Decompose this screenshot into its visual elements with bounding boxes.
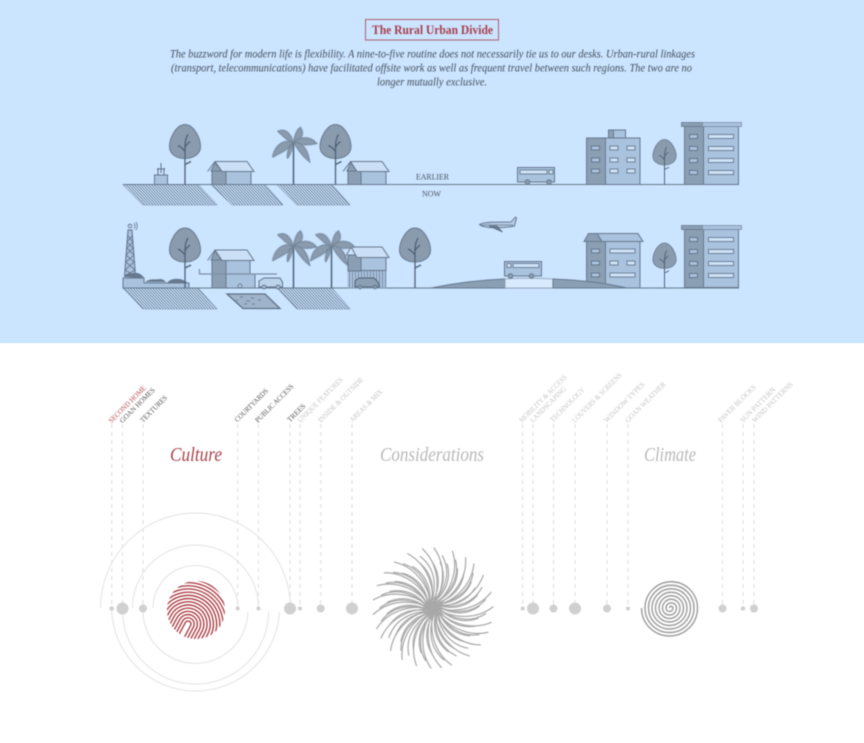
icon: tower block bbox=[682, 226, 742, 288]
icon: house bbox=[343, 162, 389, 184]
rotated labels: considerations: MOBILITY & ACCESS bbox=[517, 373, 569, 424]
heading: considerations: Considerations bbox=[380, 444, 484, 466]
rotated labels: climate: PAVER BLOCKS bbox=[716, 383, 758, 424]
rotated labels: climate bbox=[716, 380, 795, 424]
title: The Rural Urban Divide bbox=[372, 23, 493, 37]
label: earlier: EARLIER bbox=[416, 172, 449, 182]
icon: palm tree bbox=[272, 128, 316, 184]
rotated labels: considerations bbox=[517, 371, 668, 424]
rotated labels: culture: COURTYARDS bbox=[233, 386, 270, 424]
rotated labels: culture: TREES bbox=[285, 402, 307, 424]
icon: spiral bbox=[642, 582, 698, 636]
ground line: now bbox=[123, 287, 739, 289]
ground hatching: now fields bbox=[123, 288, 350, 309]
scene: now bbox=[123, 217, 742, 309]
icon: telecom tower and shrubs bbox=[123, 222, 189, 288]
icon: house bbox=[208, 162, 254, 184]
rotated labels: considerations: LOUVERS & SCREENS bbox=[570, 371, 624, 424]
rotated labels: culture: SECOND HOME bbox=[107, 383, 148, 425]
icon: house with courtyard and car bbox=[200, 250, 282, 289]
rotated labels: considerations: TECHNOLOGY bbox=[548, 385, 587, 424]
dashed leader lines bbox=[112, 424, 754, 604]
icon: bus on bridge bbox=[504, 262, 542, 278]
rotated labels: culture: AREAS & MIX bbox=[348, 387, 385, 424]
rotated labels: culture: PUBLIC ACCESS bbox=[253, 382, 295, 424]
icon: pool bbox=[227, 294, 280, 308]
rotated labels: climate: SUN PATTERN bbox=[738, 385, 778, 424]
icon: small tree bbox=[653, 140, 676, 184]
icon: road embankment bbox=[431, 278, 627, 288]
icon: airplane bbox=[480, 217, 516, 232]
intro text block: The buzzword for modern life is flexibility. A nine-to-five routine does not necessarily tie us to our desks. Urban-rural linkages bbox=[170, 48, 696, 60]
rotated labels: culture: GOAN HOMES bbox=[118, 386, 157, 425]
panel: culture, considerations and climate diagram bbox=[100, 371, 795, 691]
icon: tower block bbox=[682, 122, 742, 184]
rotated labels: culture: INSIDE & OUTSIDE bbox=[316, 375, 366, 424]
ground line: earlier bbox=[123, 184, 739, 186]
rotated labels: considerations: GOAN WEATHER bbox=[623, 380, 668, 424]
heading: climate: Climate bbox=[644, 444, 696, 466]
icon: fingerprint bbox=[166, 580, 226, 640]
heading: culture: Culture bbox=[170, 444, 222, 466]
rotated labels: considerations: WINDOW TYPES bbox=[602, 380, 647, 424]
rotated labels: culture: UNIQUE FEATURES bbox=[296, 375, 345, 424]
rotated labels: considerations: LANDSCAPING bbox=[528, 384, 568, 424]
icon: tree bbox=[320, 124, 351, 184]
icon: apartment block with pitched roof bbox=[584, 234, 643, 288]
rotated labels: climate: WIND PATTERNS bbox=[750, 380, 795, 424]
icon: swirling hair burst bbox=[372, 547, 493, 669]
rotated labels: culture bbox=[107, 375, 385, 425]
scene: earlier bbox=[123, 122, 742, 205]
intro text block: (transport, telecommunications) have facilitated offsite work as well as frequent travel between such regions. The two are no bbox=[171, 62, 692, 74]
label: now: NOW bbox=[422, 190, 441, 198]
icon: bus bbox=[518, 168, 554, 184]
ground hatching: earlier fields bbox=[123, 184, 350, 205]
rotated labels: culture: TEXTURES bbox=[138, 393, 169, 424]
icon: small tree bbox=[653, 243, 676, 288]
icon: palm tree bbox=[272, 231, 316, 288]
title bbox=[366, 20, 498, 40]
icon: house on stilts with car bbox=[345, 247, 389, 289]
intro text block: longer mutually exclusive. bbox=[377, 76, 487, 88]
intro text block bbox=[170, 48, 696, 88]
icon: water well bbox=[154, 163, 168, 184]
icon: palm tree bbox=[310, 231, 354, 288]
orbit arcs around culture bbox=[100, 513, 290, 691]
icon: tree bbox=[170, 228, 200, 288]
leader dots bbox=[109, 602, 758, 614]
icon: tree bbox=[170, 124, 200, 184]
icon: apartment block bbox=[586, 130, 640, 184]
icon: tree bbox=[400, 228, 430, 288]
panel: rural urban illustration background bbox=[0, 0, 864, 343]
